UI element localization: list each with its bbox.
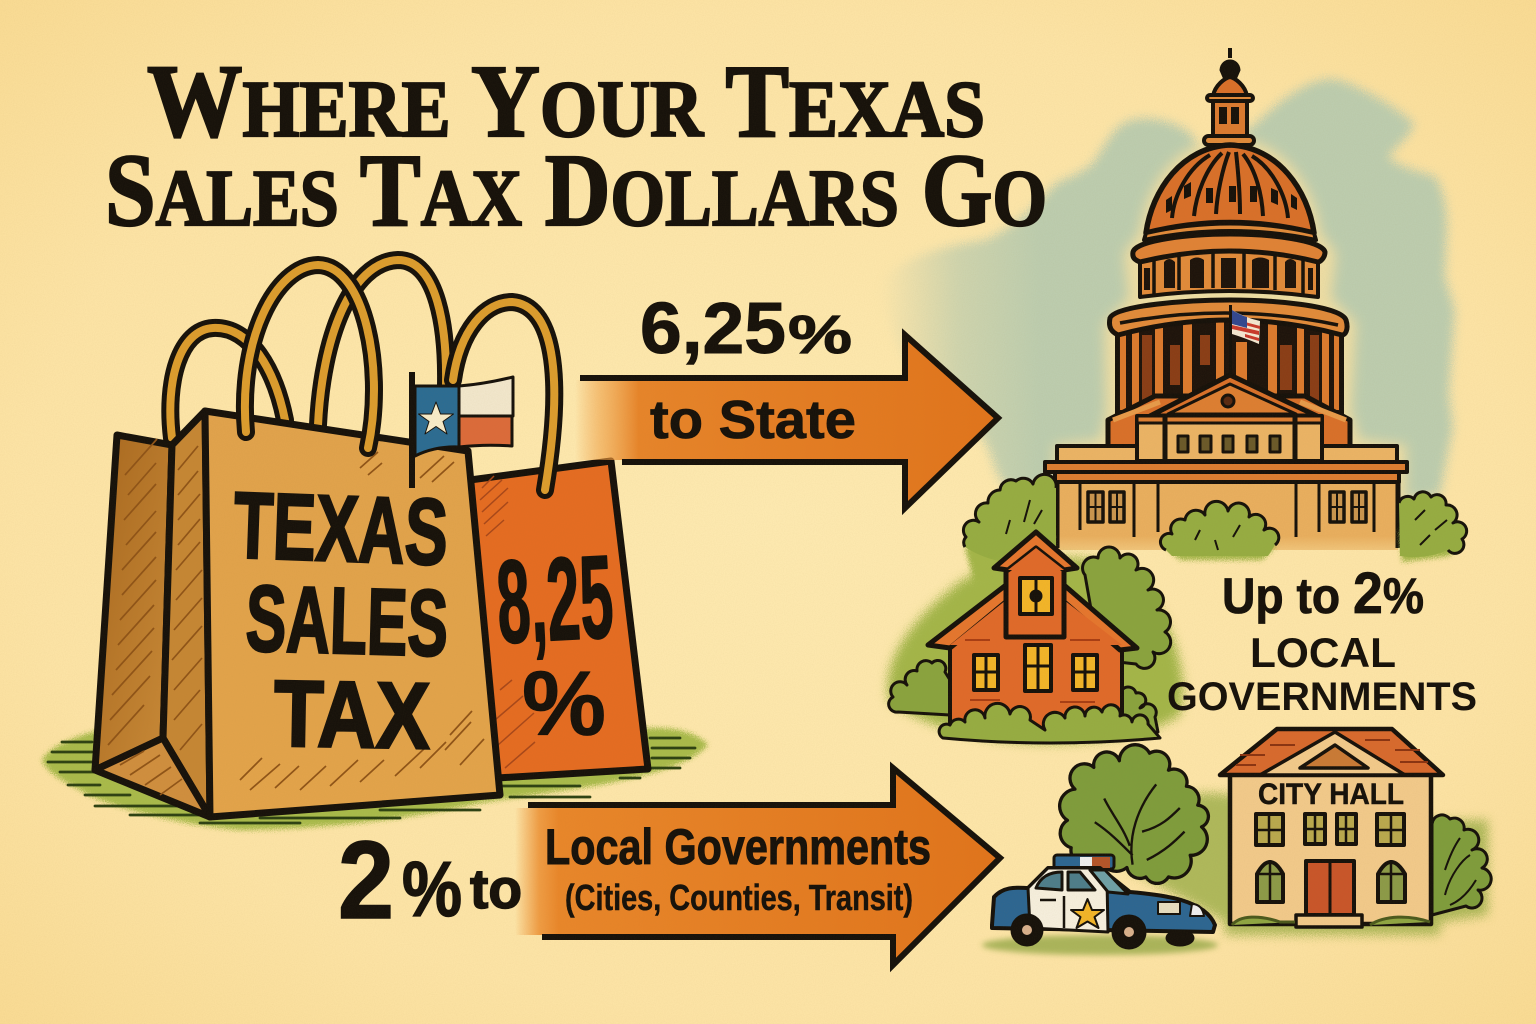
label: up to 2% local governments [1167, 561, 1477, 719]
bag label text: TEXAS [232, 472, 450, 585]
police car [982, 855, 1218, 955]
arrow label: cities, counties, transit: (Cities, Counties, Transit) [565, 877, 913, 918]
cream halo around capitol [1060, 143, 1400, 500]
school front hedge [939, 703, 1160, 743]
label: 2% to: to [470, 857, 522, 920]
schoolhouse scene [888, 532, 1183, 743]
title: SALES TAX DOLLARS GO [105, 133, 1047, 248]
capitol base wing walls [1045, 462, 1407, 550]
school shrubs [889, 547, 1171, 735]
capitol building [1045, 48, 1407, 550]
capitol dome [1144, 145, 1316, 240]
school building [928, 532, 1137, 728]
label: 2% to: % [402, 845, 462, 933]
arrow: to local governments [515, 768, 1000, 965]
capitol drum [1133, 234, 1325, 297]
Texas flag on pole [412, 372, 513, 488]
bag label text: TAX [273, 661, 431, 768]
label: 2% to: 2 [338, 819, 394, 942]
label: up to 2% local governments: LOCAL [1250, 629, 1396, 676]
capitol lantern and finial [1204, 48, 1254, 145]
capitol colonnade [1117, 318, 1342, 414]
arrow label: 6,25% [640, 289, 852, 369]
green wash under capitol bushes [965, 520, 1462, 585]
bush right of city hall [1432, 815, 1491, 915]
back handles [170, 260, 446, 438]
bag label text: SALES [245, 566, 449, 676]
bag label text [232, 472, 450, 768]
tree [1060, 745, 1208, 883]
green wash behind city hall [1130, 793, 1488, 935]
orange price bag: % [522, 653, 606, 755]
shopping bags [42, 260, 708, 830]
capitol bushes [963, 474, 1467, 585]
centre capitol bush [1160, 501, 1279, 556]
label: 2% to [338, 819, 522, 942]
orange price bag [470, 461, 648, 778]
label: up to 2% local governments: Up to 2% [1222, 561, 1424, 626]
city hall scene [982, 729, 1491, 955]
title [105, 44, 1047, 248]
capitol lower block [1057, 375, 1397, 462]
label: up to 2% local governments: GOVERNMENTS [1167, 675, 1477, 719]
grass under bags [42, 728, 708, 830]
arrow: to state [575, 289, 998, 508]
city hall doors [1306, 861, 1354, 915]
front handles [245, 265, 554, 490]
right capitol bush [1399, 492, 1467, 557]
green wash behind school [888, 557, 1183, 743]
arrow label: 6,25%: % [788, 305, 852, 365]
city hall building [1220, 729, 1443, 927]
paper bag body [95, 411, 500, 817]
sky cloud behind capitol [880, 79, 1455, 500]
city hall sign: CITY HALL [1258, 778, 1404, 811]
capitol lower ring [1109, 300, 1347, 335]
left capitol bush [963, 474, 1056, 564]
title: WHERE YOUR TEXAS [147, 44, 985, 159]
arrow label: local governments: Local Governments [545, 819, 931, 875]
american flag [1229, 305, 1260, 375]
price text: 8,25 [494, 531, 616, 669]
arrow label: 6,25%: 6,25 [640, 289, 786, 369]
arrow label: to State: to State [650, 390, 856, 450]
